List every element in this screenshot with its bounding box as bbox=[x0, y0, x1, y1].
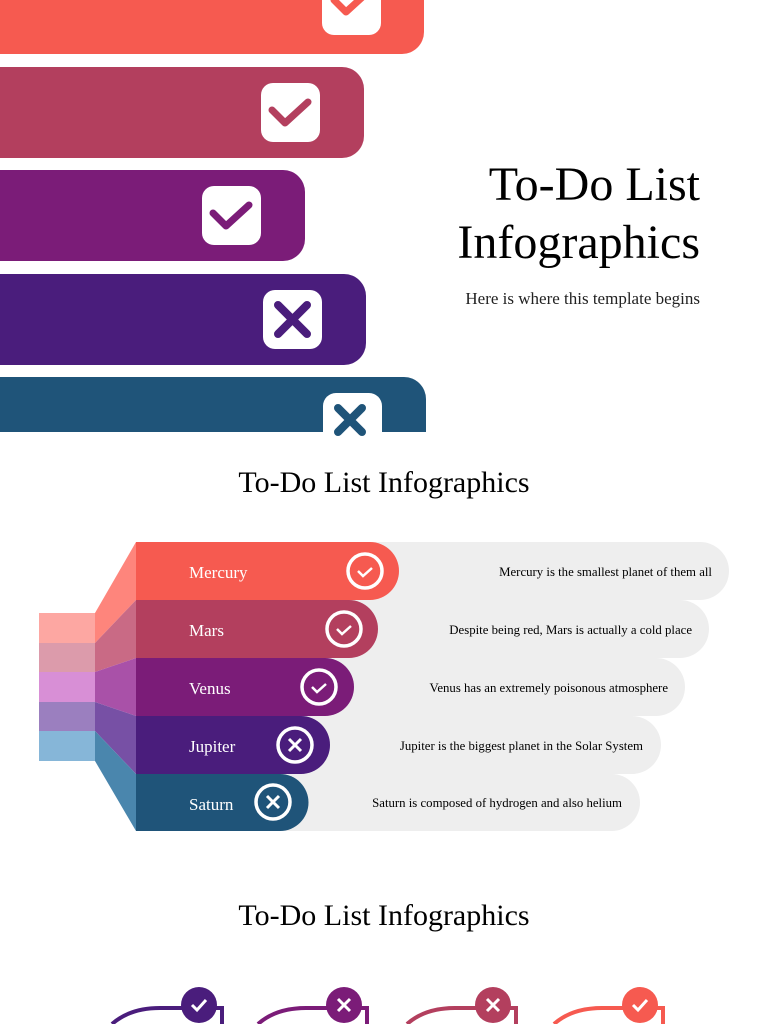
left stripe block bbox=[39, 542, 136, 831]
bar 4 bbox=[0, 274, 366, 365]
bar 3 bbox=[0, 170, 305, 261]
row: Jupiter: Jupiter is the biggest planet in the Solar System bbox=[400, 739, 643, 753]
bottom item 3 bbox=[407, 987, 516, 1024]
main title: To-Do List bbox=[489, 158, 701, 211]
row: Saturn: Saturn bbox=[189, 795, 234, 814]
row: Venus: Venus has an extremely poisonous atmosphere bbox=[430, 681, 668, 695]
row: Mercury: Mercury is the smallest planet of them all bbox=[499, 565, 712, 579]
bar 5 bbox=[0, 377, 426, 432]
main title bbox=[457, 158, 701, 269]
row: Saturn bbox=[136, 774, 640, 831]
row: Mercury: Mercury bbox=[189, 563, 248, 582]
row: Mars bbox=[136, 600, 709, 658]
row: Mars: Despite being red, Mars is actually a cold place bbox=[449, 623, 692, 637]
section 3 heading: To-Do List Infographics bbox=[238, 899, 530, 932]
main title: Infographics bbox=[457, 216, 700, 269]
row: Mars: Mars bbox=[189, 621, 224, 640]
bar 1 bbox=[0, 0, 424, 54]
bar 2 bbox=[0, 67, 364, 158]
row: Jupiter bbox=[136, 716, 661, 774]
subtitle: Here is where this template begins bbox=[465, 289, 700, 308]
bottom item 2 bbox=[258, 987, 367, 1024]
section 2 heading: To-Do List Infographics bbox=[238, 466, 530, 499]
row: Jupiter: Jupiter bbox=[189, 737, 236, 756]
bottom item 1 bbox=[112, 987, 222, 1024]
row: Mercury bbox=[136, 542, 729, 600]
row: Venus bbox=[136, 658, 685, 716]
bottom item 4 bbox=[554, 987, 663, 1024]
row: Saturn: Saturn is composed of hydrogen and also helium bbox=[372, 796, 622, 810]
row: Venus: Venus bbox=[189, 679, 231, 698]
